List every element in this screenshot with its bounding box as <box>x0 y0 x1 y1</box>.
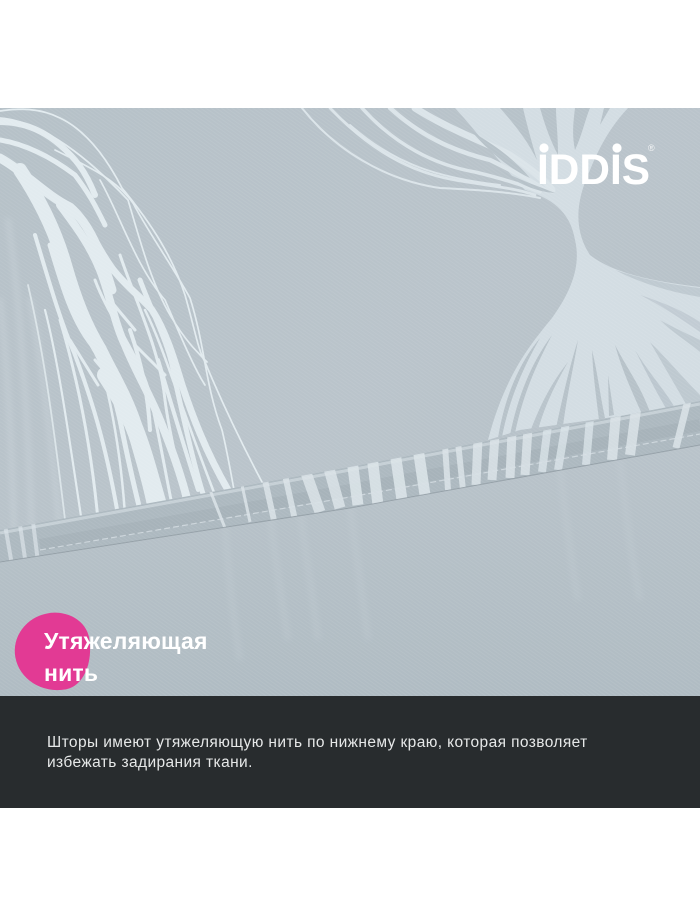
hem with weighted thread <box>0 400 700 565</box>
faint far-left streaks <box>0 220 60 535</box>
logo letters: IDDIS <box>537 146 650 194</box>
hem stitching <box>40 434 700 550</box>
fabric weave texture <box>0 108 700 696</box>
central hourglass motif <box>302 108 700 440</box>
fabric background <box>0 108 700 696</box>
upper strands <box>302 108 552 198</box>
heading: нить <box>44 660 98 686</box>
dense zigzag mass <box>100 242 231 490</box>
description text <box>47 734 588 771</box>
registered mark: ® <box>648 143 655 153</box>
heading <box>44 628 208 686</box>
logo i dots <box>539 143 622 153</box>
description text: Шторы имеют утяжеляющую нить по нижнему краю, которая позволяет <box>47 734 588 751</box>
dark wedges <box>472 108 700 438</box>
left strand fan <box>0 109 262 535</box>
dark description panel <box>0 696 700 808</box>
lower fabric with faint strands <box>0 445 700 696</box>
motif mass <box>455 108 700 440</box>
hem lower edge <box>0 445 700 562</box>
description text: избежать задирания ткани. <box>47 754 253 771</box>
pink accent blob <box>9 607 97 697</box>
heading: Утяжеляющая <box>44 628 208 654</box>
fabric photo <box>0 108 700 696</box>
thin outer strands <box>0 109 262 495</box>
hem highlight <box>0 404 700 533</box>
hem stripes <box>5 400 688 565</box>
IDDIS logo <box>537 143 655 194</box>
hem shadow <box>40 425 700 545</box>
top sweeping bands <box>0 122 95 195</box>
